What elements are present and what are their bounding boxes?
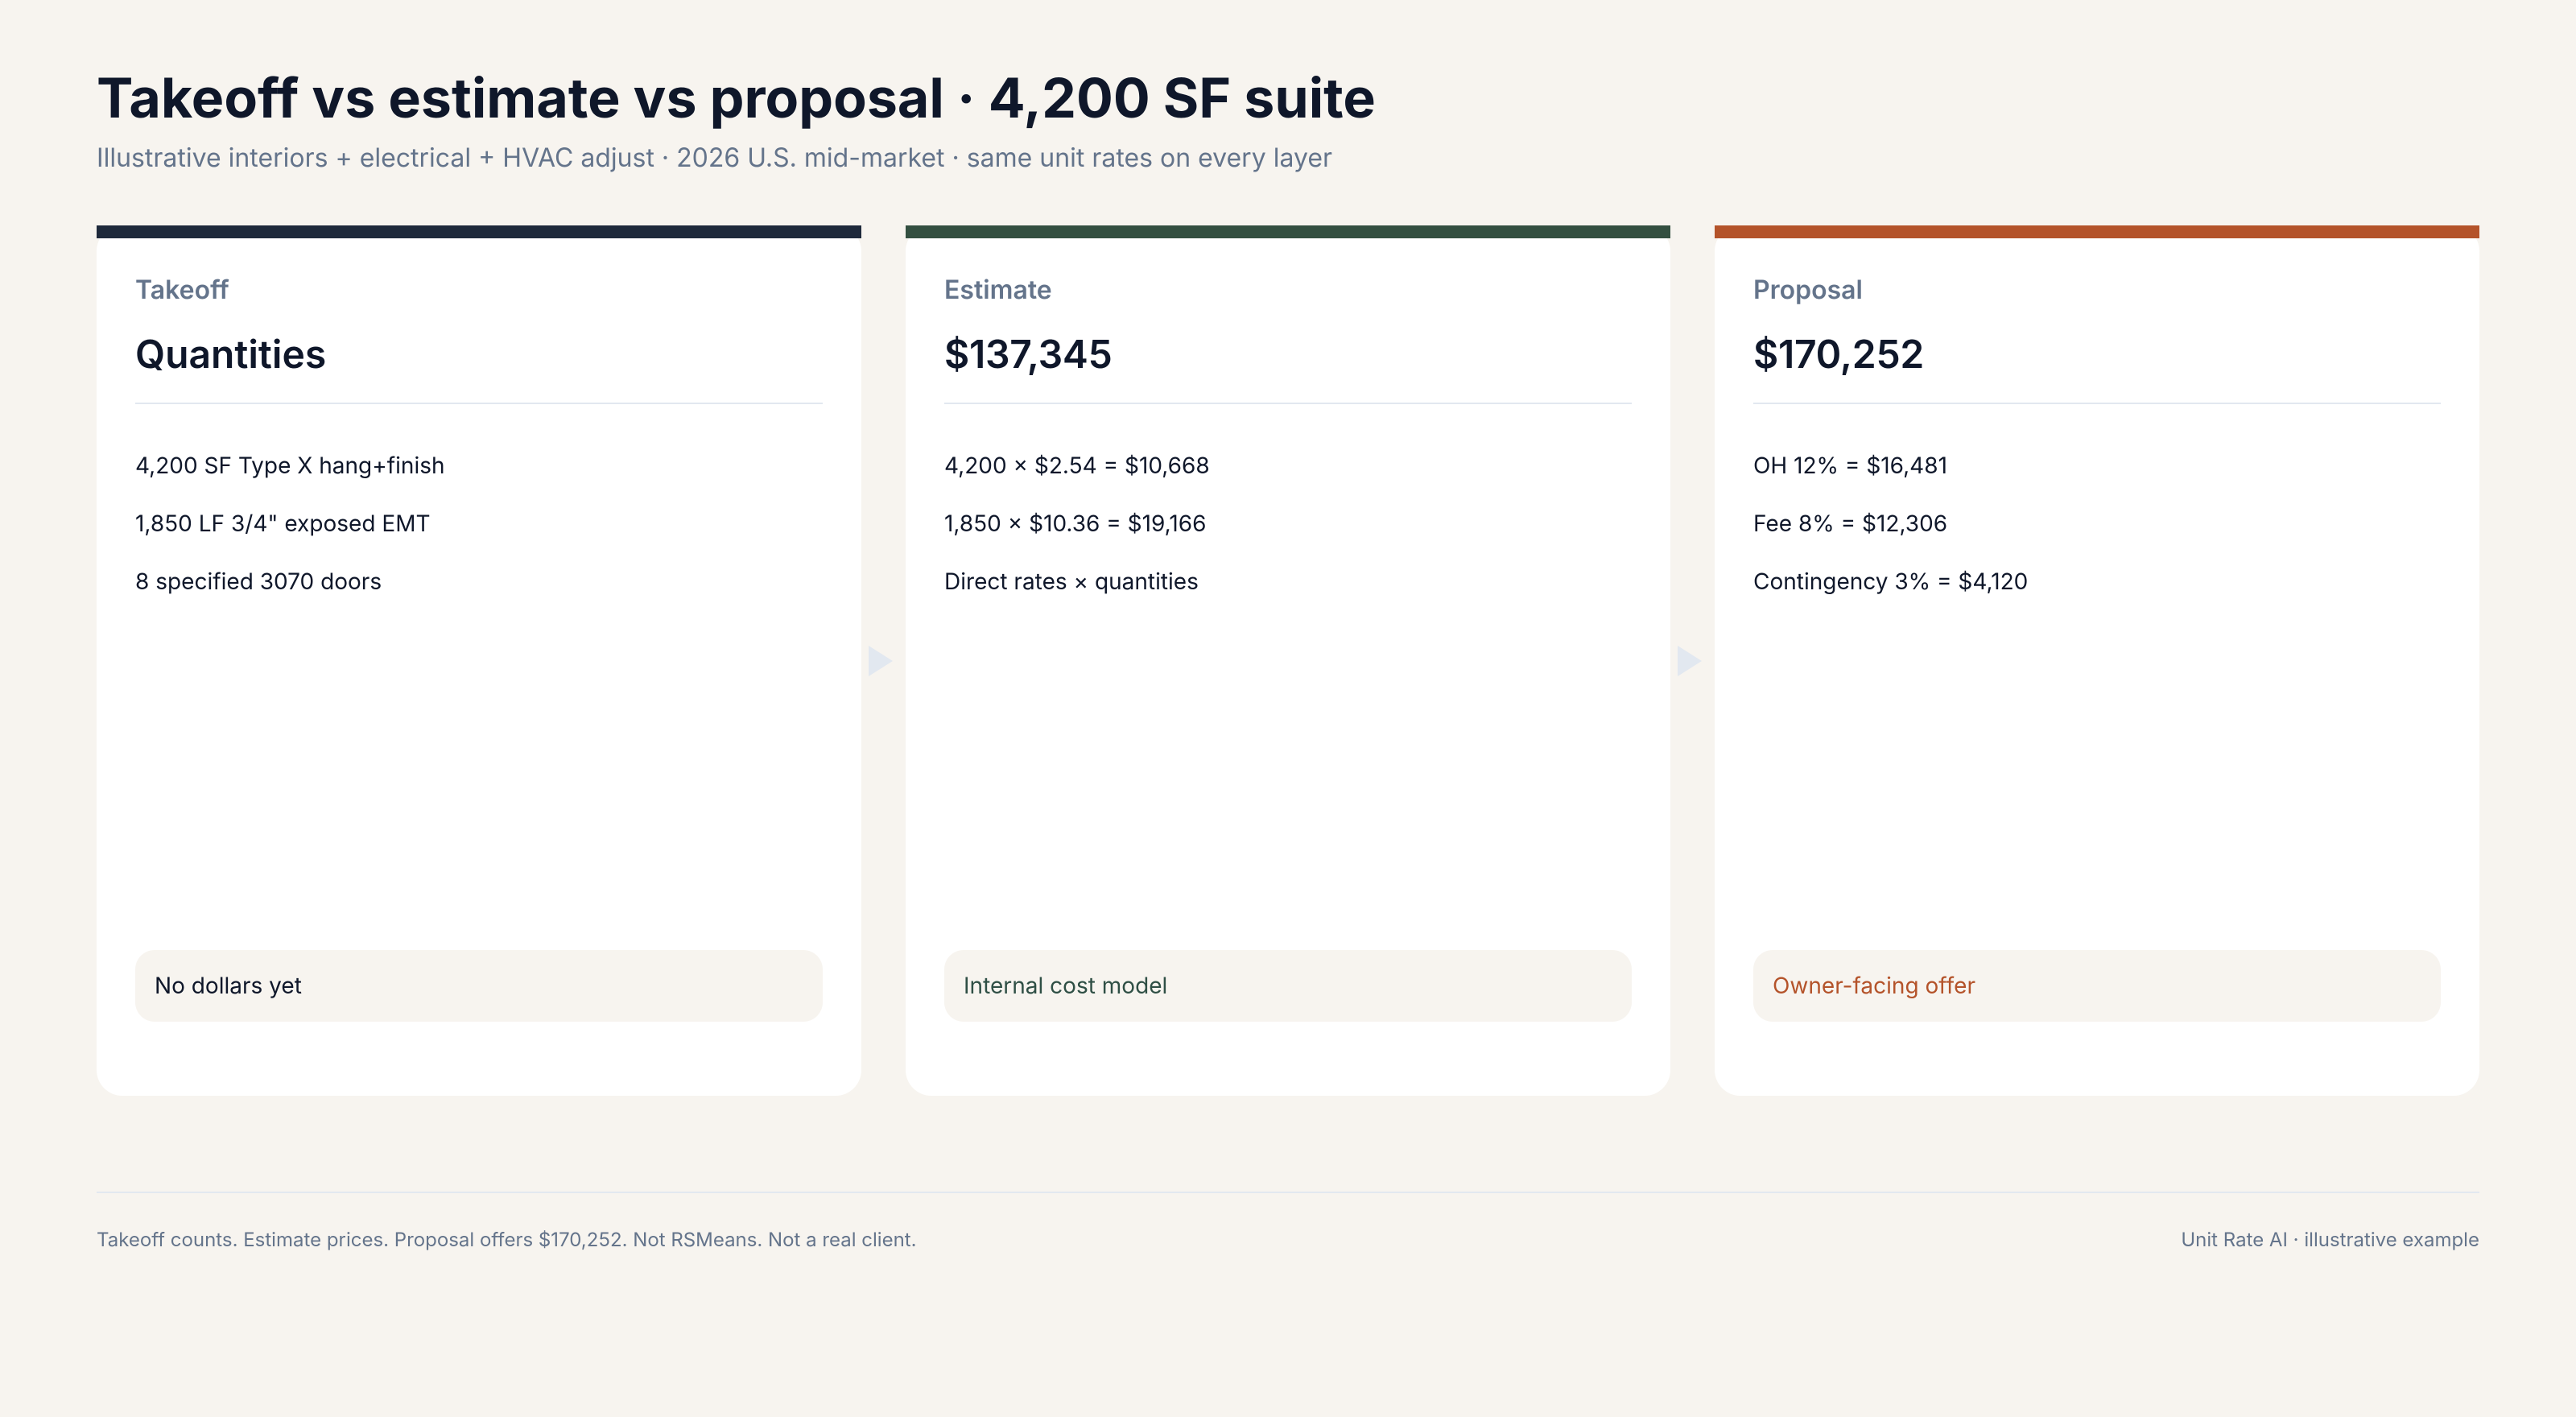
estimate line: conduit: 1,850 × $10.36 = $19,166	[944, 510, 1206, 537]
subtitle: Illustrative interiors + electrical + HVAC adjust · 2026 U.S. mid-market · same unit rates on every layer	[97, 142, 1332, 173]
proposal line: fee: Fee 8% = $12,306	[1753, 510, 1947, 537]
takeoff label: Takeoff	[135, 274, 229, 305]
takeoff accent bar	[97, 225, 861, 238]
takeoff headline: Quantities	[135, 330, 326, 378]
footer note: Takeoff counts. Estimate prices. Proposal offers $170,252. Not RSMeans. Not a real client.	[97, 1228, 917, 1251]
estimate label: Estimate	[944, 274, 1052, 305]
panel: takeoff	[97, 225, 861, 1096]
estimate callout: Internal cost model	[964, 972, 1167, 999]
takeoff callout	[135, 950, 823, 1022]
estimate headline: $137,345	[944, 330, 1113, 378]
arrow: estimate to proposal	[1678, 646, 1702, 676]
panel: proposal	[1715, 225, 2479, 1096]
panel: estimate	[906, 225, 1670, 1096]
estimate line: drywall: 4,200 × $2.54 = $10,668	[944, 452, 1210, 479]
title: Takeoff vs estimate vs proposal · 4,200 SF suite	[97, 65, 1376, 131]
proposal callout	[1753, 950, 2441, 1022]
proposal label: Proposal	[1753, 274, 1863, 305]
estimate accent bar	[906, 225, 1670, 238]
estimate line: method: Direct rates × quantities	[944, 568, 1199, 595]
proposal headline: $170,252	[1753, 330, 1924, 378]
arrow: takeoff to estimate	[869, 646, 892, 676]
proposal callout: Owner-facing offer	[1773, 972, 1975, 999]
takeoff line: drywall: 4,200 SF Type X hang+finish	[135, 452, 445, 479]
proposal line: overhead: OH 12% = $16,481	[1753, 452, 1947, 479]
takeoff line: conduit: 1,850 LF 3/4" exposed EMT	[135, 510, 431, 537]
takeoff line: doors: 8 specified 3070 doors	[135, 568, 382, 595]
proposal accent bar	[1715, 225, 2479, 238]
takeoff callout: No dollars yet	[155, 972, 302, 999]
estimate callout	[944, 950, 1632, 1022]
footer credit: Unit Rate AI · illustrative example	[2181, 1228, 2479, 1251]
proposal line: contingency: Contingency 3% = $4,120	[1753, 568, 2028, 595]
